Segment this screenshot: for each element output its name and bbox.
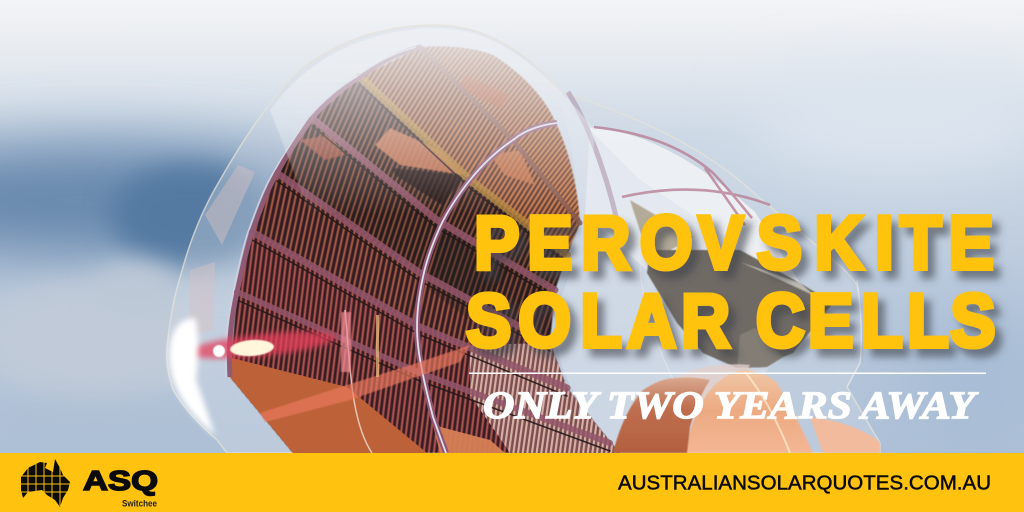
subtitle: ONLY TWO YEARS AWAY (483, 384, 979, 427)
dark grey substrate behind the title (630, 200, 833, 368)
film edge detail (190, 165, 255, 335)
red light flare (169, 312, 470, 435)
title line 2: SOLAR CELLS (466, 279, 995, 363)
film outline right (640, 260, 861, 453)
footer bar (0, 453, 1024, 512)
title line 1: PEROVSKITE (474, 201, 994, 285)
top wash over the film (270, 28, 595, 215)
cell row bands (237, 47, 610, 451)
divider line (469, 372, 986, 374)
fingers (613, 364, 880, 453)
photo: flexible perovskite solar film held in fingers (167, 25, 880, 453)
orange lower panel (230, 358, 427, 453)
logo: Switchee: Switchee (122, 498, 157, 508)
icon: Australia map with solar grid (20, 459, 70, 507)
warm reflection patches (300, 75, 535, 320)
solar cell rows (230, 46, 620, 453)
website url: AUSTRALIANSOLARQUOTES.COM.AU (618, 472, 991, 494)
logo: ASQ: ASQ (83, 465, 158, 496)
transparent film roll (167, 25, 880, 453)
cell arcs: left and middle busbars (225, 47, 557, 453)
clear film section at right (556, 92, 820, 453)
title: Perovskite Solar Cells (466, 201, 995, 363)
pale lower right cell rows (470, 343, 620, 453)
